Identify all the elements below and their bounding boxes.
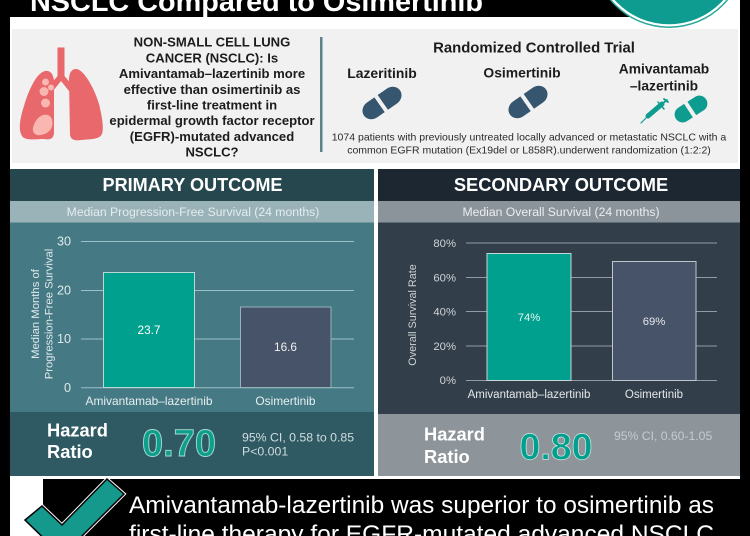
text: study question: CANCER (NSCLC): Is: [146, 50, 278, 65]
heading: secondary outcome: SECONDARY OUTCOME: [454, 174, 668, 195]
hazard ratio: secondary: Ratio: [424, 446, 470, 467]
bar chart: overall survival: [407, 238, 717, 401]
bar: amivantamab-lazertinib 23.7: 23.7: [138, 323, 160, 337]
bar chart: progression-free survival: Amivantamab–lazertinib: [86, 394, 213, 408]
heading: randomized controlled trial: Randomized Controlled Trial: [433, 40, 635, 56]
bar chart: progression-free survival: 10: [57, 332, 71, 346]
text: study question: Amivantamab–lazertinib more: [119, 66, 305, 81]
text: study question: (EGFR)-mutated advanced: [130, 129, 294, 144]
text: study question: first-line treatment in: [147, 98, 277, 112]
bar chart: overall survival: 0%: [440, 375, 456, 387]
bar chart: progression-free survival: 20: [57, 284, 71, 298]
hazard ratio: secondary: Hazard: [424, 424, 485, 444]
bar chart: progression-free survival: Osimertinib: [255, 394, 316, 408]
bar chart: progression-free survival: 0: [64, 381, 71, 395]
bar: amivantamab-lazertinib 23.7: [104, 272, 194, 388]
bar chart: progression-free survival: [30, 234, 354, 408]
bar chart: overall survival: Overall Survival Rate: [407, 264, 419, 366]
bar chart: overall survival: 80%: [433, 238, 456, 250]
subheading: median overall survival: Median Overall Survival (24 months): [462, 205, 660, 219]
label: amivantamab-lazertinib: [619, 61, 709, 94]
hazard ratio: primary: Hazard: [47, 420, 108, 440]
icon: syringe: [641, 99, 668, 123]
text: study question: effective than osimertinib as: [124, 82, 300, 97]
bar chart: overall survival: 20%: [433, 341, 456, 353]
bar chart: overall survival: Osimertinib: [625, 389, 683, 401]
bar chart: overall survival: Amivantamab–lazertinib: [468, 389, 590, 401]
hazard ratio: primary: [10, 412, 374, 476]
hazard ratio: primary: P<0.001: [242, 444, 288, 458]
bar chart: progression-free survival: Median Months of: [30, 268, 42, 359]
hazard ratio: primary: 0.70: [142, 423, 216, 465]
text: study question: [109, 35, 315, 160]
bar: osimertinib 16.6: 16.6: [274, 340, 297, 354]
text: study question: NON-SMALL CELL LUNG: [134, 35, 290, 50]
hazard ratio: primary: Ratio: [47, 441, 93, 462]
icon: lazertinib pill: [359, 83, 405, 123]
text: trial description: 1074 patients with previously untreated locally advanced or metastatic NSCLC with a: [332, 132, 726, 144]
hazard ratio: secondary: [378, 414, 740, 476]
bar chart: progression-free survival: 30: [57, 234, 71, 248]
bar: amivantamab-lazertinib 74%: 74%: [518, 312, 540, 324]
bar: osimertinib 69%: [612, 262, 696, 380]
label: amivantamab-lazertinib: Amivantamab: [619, 61, 709, 76]
bar chart: overall survival: 60%: [433, 272, 456, 284]
icon: checkmark: [25, 479, 124, 536]
label: amivantamab-lazertinib: –lazertinib: [630, 79, 698, 94]
conclusion: [129, 492, 714, 536]
bar chart: progression-free survival: Progression-Free Survival: [44, 249, 56, 379]
text: trial description: [332, 132, 726, 156]
text: trial description: common EGFR mutation (Ex19del or L858R).underwent randomization (1:2:2): [347, 144, 711, 156]
text: study question: NSCLC?: [185, 145, 239, 160]
panel: primary outcome: [10, 169, 374, 476]
hazard ratio: secondary: 0.80: [520, 426, 592, 468]
text: study question: epidermal growth factor receptor: [109, 113, 315, 128]
icon: lungs: [20, 48, 103, 140]
hazard ratio: secondary: 95% CI, 0.60-1.05: [614, 429, 712, 443]
badge: teal circle: [592, 0, 746, 28]
bar: osimertinib 69%: 69%: [643, 316, 665, 328]
panel: secondary outcome: [378, 169, 740, 476]
bar chart: overall survival: 40%: [433, 306, 456, 318]
heading: primary outcome: PRIMARY OUTCOME: [103, 175, 282, 195]
conclusion: Amivantamab-lazertinib was superior to osimertinib as: [129, 492, 714, 519]
label: lazertinib: Lazeritinib: [347, 65, 417, 81]
panel: study question and trial design: [12, 29, 738, 163]
subheading: median progression-free survival: Median Progression-Free Survival (24 months): [67, 205, 319, 219]
bar: osimertinib 16.6: [240, 307, 331, 388]
bar: amivantamab-lazertinib 74%: [487, 254, 571, 380]
icon: amivantamab-lazertinib pill: [672, 92, 710, 126]
icon: osimertinib pill: [505, 82, 551, 122]
hazard ratio: primary: 95% CI, 0.58 to 0.85: [242, 430, 354, 444]
label: osimertinib: Osimertinib: [483, 64, 561, 80]
